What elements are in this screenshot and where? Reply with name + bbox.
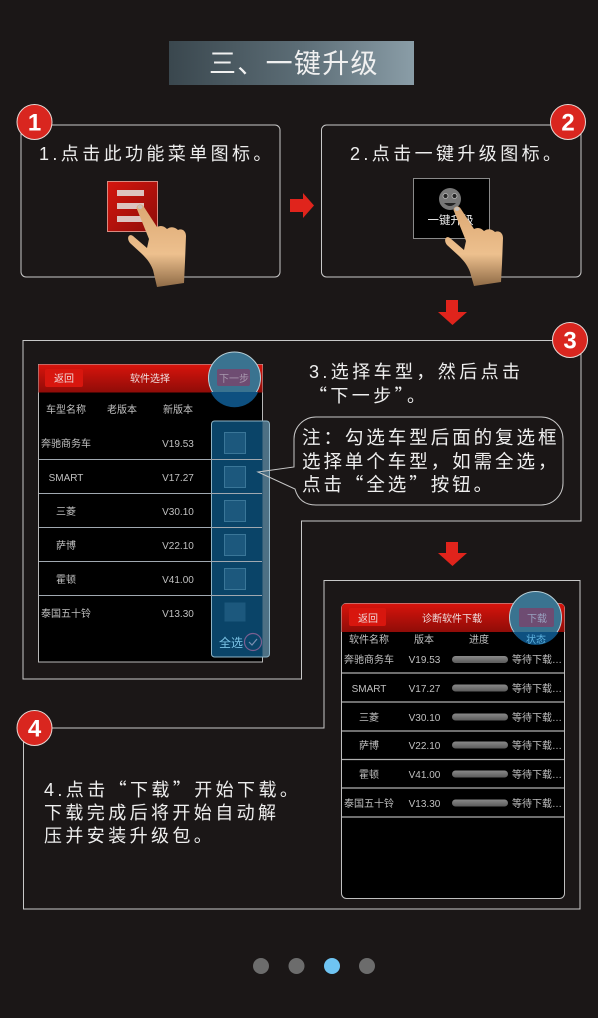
badge 3: 3 [563, 328, 577, 354]
column headers [349, 633, 489, 646]
step 4 text: 下载完成后将开始自动解 [44, 803, 279, 823]
rows: 三菱 [56, 506, 76, 518]
arrow: down to step 4 [438, 542, 467, 566]
phone screen: software selection [38, 364, 262, 662]
badge 4 [17, 710, 52, 746]
callout: note: 选择单个车型，如需全选， [302, 451, 559, 472]
download rows: SMART [352, 684, 386, 695]
column headers [46, 403, 193, 416]
step 3 text [309, 362, 523, 408]
highlight circle: download: 状态 [526, 633, 546, 646]
callout: note [258, 417, 563, 505]
download rows: 泰国五十铃 [344, 797, 394, 810]
download rows: V17.27 [409, 684, 441, 695]
badge 1: 1 [28, 110, 41, 136]
download rows: V19.53 [409, 655, 441, 666]
download rows: V22.10 [409, 741, 441, 752]
rows [41, 437, 194, 620]
rows: V30.10 [162, 507, 194, 518]
icon: pointing hand [128, 204, 186, 287]
badge 3 [552, 322, 588, 358]
checkbox highlight column: 全选 [219, 635, 243, 650]
callout: note: 点击“全选”按钮。 [302, 471, 495, 497]
column headers: 版本 [414, 633, 434, 646]
phone header: 软件选择 [130, 372, 170, 385]
step 2 text: 2.点击一键升级图标。 [350, 144, 564, 164]
phone header [38, 364, 262, 392]
column headers: 新版本 [163, 403, 193, 416]
download rows: 奔驰商务车 [344, 653, 394, 666]
arrow: down to step 3 [438, 300, 467, 325]
panel: step 1 [21, 125, 280, 287]
step 1 text: 1.点击此功能菜单图标。 [39, 144, 275, 164]
download rows: 等待下载… [512, 682, 562, 695]
column headers: 进度 [469, 633, 489, 646]
checkbox highlight column [212, 421, 270, 657]
icon: one-click upgrade: 一键升级 [428, 213, 474, 227]
title [169, 41, 414, 85]
arrow: right [290, 193, 314, 218]
title: 三、一键升级 [209, 49, 379, 79]
rows: V13.30 [162, 609, 194, 620]
badge 2 [550, 104, 586, 140]
pagination dots [253, 958, 375, 974]
highlight circle: download [510, 592, 562, 646]
phone header: 诊断软件下载 [422, 612, 482, 625]
column headers: 软件名称 [349, 633, 389, 646]
download rows: 等待下载… [512, 739, 562, 752]
rows: V19.53 [162, 439, 194, 450]
callout: note: 注：勾选车型后面的复选框 [302, 427, 559, 448]
rows: 泰国五十铃 [41, 607, 91, 620]
badge 4: 4 [28, 716, 42, 742]
row dividers [39, 460, 262, 596]
badge 2: 2 [561, 110, 575, 136]
column headers: 老版本 [107, 403, 137, 416]
highlight circle: next step [208, 352, 260, 407]
rows: 萨博 [56, 539, 76, 552]
download rows: V30.10 [409, 713, 441, 724]
download rows [342, 653, 564, 817]
icon: pointing hand [445, 206, 503, 286]
step 4 text: 压并安装升级包。 [44, 826, 215, 846]
step 4 text: 4.点击“下载”开始下载。 [44, 776, 301, 802]
highlight circle: download: 下载 [527, 613, 547, 625]
download rows: 三菱 [359, 712, 379, 724]
rows: V22.10 [162, 541, 194, 552]
rows: 霍顿 [56, 573, 76, 586]
download rows: V13.30 [409, 799, 441, 810]
phone header: 返回 [54, 373, 74, 385]
panel: step 3 [23, 340, 581, 679]
download rows: 等待下载… [512, 711, 562, 724]
phone header: 返回 [358, 613, 378, 625]
column headers: 车型名称 [46, 403, 86, 416]
download rows: 萨博 [359, 739, 379, 752]
download rows: 霍顿 [359, 768, 379, 781]
icon: red menu [108, 182, 158, 232]
icon: one-click upgrade [414, 178, 490, 238]
rows: SMART [49, 473, 83, 484]
download rows: 等待下载… [512, 768, 562, 781]
step 3 text: 3.选择车型，然后点击 [309, 362, 523, 382]
panel: step 4 [24, 580, 580, 909]
phone screen: software download [342, 604, 564, 898]
download rows: V41.00 [409, 770, 441, 781]
highlight circle: next step: 下一步 [219, 373, 249, 385]
rows: V41.00 [162, 575, 194, 586]
step 3 text: “下一步”。 [309, 382, 428, 408]
phone header [342, 604, 564, 632]
rows: 奔驰商务车 [41, 437, 91, 450]
download rows: 等待下载… [512, 653, 562, 666]
download rows: 等待下载… [512, 797, 562, 810]
badge 1 [17, 104, 52, 140]
rows: V17.27 [162, 473, 194, 484]
panel: step 2 [322, 125, 581, 286]
